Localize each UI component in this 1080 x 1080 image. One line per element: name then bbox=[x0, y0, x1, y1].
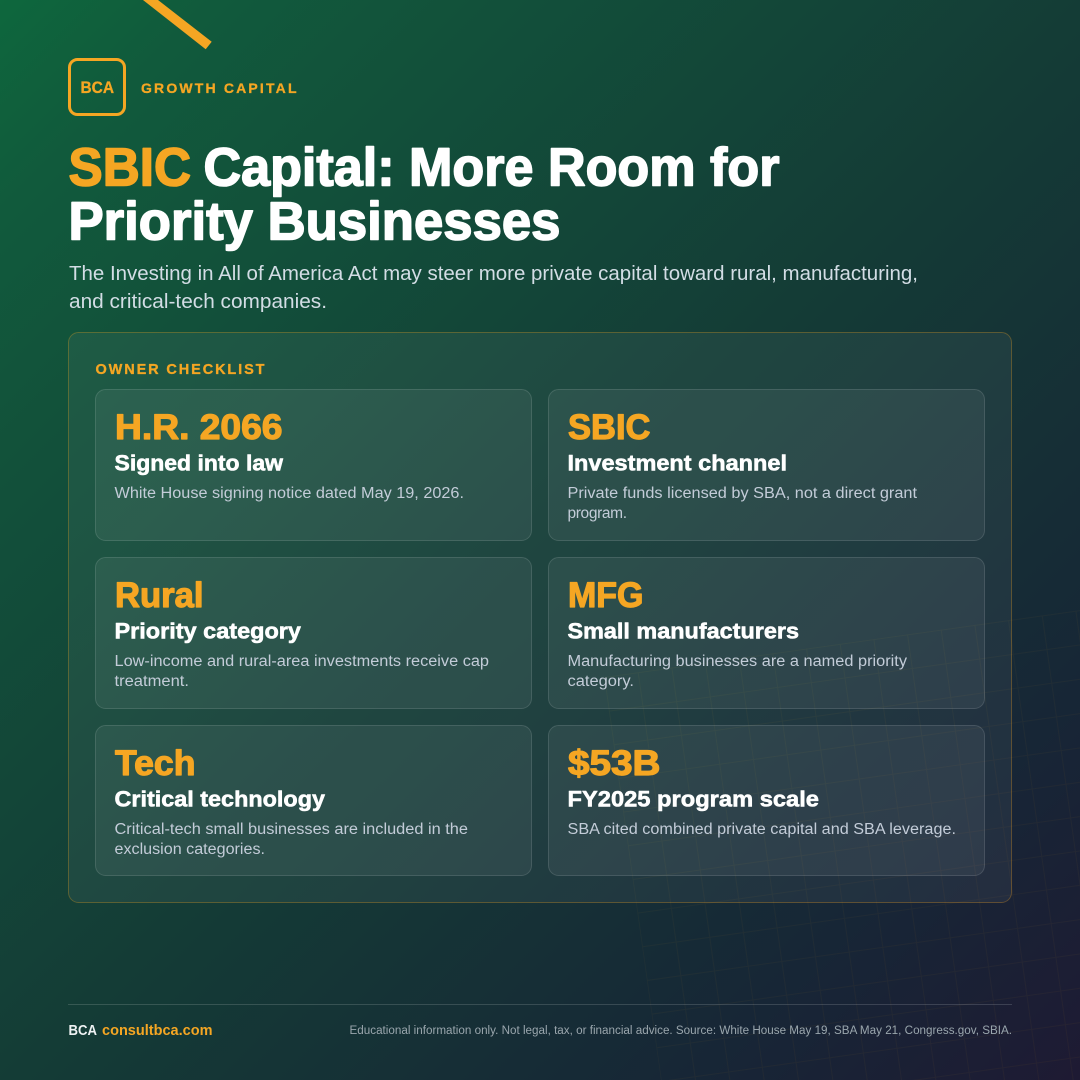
title: Priority Businesses bbox=[68, 192, 560, 252]
title: Capital: More Room for bbox=[204, 138, 780, 198]
panel heading: OWNER CHECKLIST bbox=[96, 362, 265, 378]
card: MFG bbox=[548, 558, 984, 708]
background grid pattern bbox=[604, 610, 1080, 1080]
card: Rural: Priority category bbox=[114, 618, 301, 644]
card: MFG: MFG bbox=[568, 576, 644, 615]
brand label: GROWTH CAPITAL bbox=[141, 80, 297, 96]
card: SBIC: Private funds licensed by SBA, not a direct grant bbox=[568, 485, 918, 502]
disclaimer: Educational information only. Not legal, tax, or financial advice. Source: White House May 19, SBA May 21, Congress.gov, SBIA. bbox=[350, 1025, 1012, 1037]
subtitle bbox=[69, 262, 918, 313]
panel: owner checklist bbox=[68, 332, 1012, 902]
logo badge bbox=[70, 60, 124, 114]
card: Tech: exclusion categories. bbox=[114, 841, 265, 858]
card: Tech: Critical technology bbox=[114, 786, 325, 812]
footer brand: BCA bbox=[68, 1023, 97, 1039]
card: H.R. 2066 bbox=[96, 390, 532, 540]
card: SBIC bbox=[548, 390, 984, 540]
title: SBIC bbox=[68, 138, 191, 198]
accent stripe bbox=[143, 0, 212, 49]
card: H.R. 2066: H.R. 2066 bbox=[115, 408, 282, 447]
card: H.R. 2066: Signed into law bbox=[114, 450, 283, 476]
brand header bbox=[70, 60, 297, 114]
card: $53B: SBA cited combined private capital and SBA leverage. bbox=[568, 821, 956, 838]
card: MFG: category. bbox=[568, 673, 634, 690]
card: Rural: Rural bbox=[115, 576, 204, 615]
card: H.R. 2066: White House signing notice dated May 19, 2026. bbox=[114, 485, 464, 502]
logo badge: BCA bbox=[80, 79, 114, 97]
card: SBIC: program. bbox=[568, 505, 627, 522]
subtitle: and critical-tech companies. bbox=[69, 290, 327, 313]
card: Rural: treatment. bbox=[114, 673, 189, 690]
card: MFG: Manufacturing businesses are a named priority bbox=[568, 653, 907, 670]
title bbox=[68, 138, 780, 252]
card: Tech bbox=[96, 726, 532, 876]
card: $53B: $53B bbox=[568, 744, 660, 783]
card: Rural: Low-income and rural-area investments receive cap bbox=[114, 653, 489, 670]
card: $53B bbox=[548, 726, 984, 876]
footer brand: consultbca.com bbox=[102, 1023, 212, 1039]
card: $53B: FY2025 program scale bbox=[568, 786, 819, 812]
card: SBIC: Investment channel bbox=[568, 450, 787, 476]
subtitle: The Investing in All of America Act may steer more private capital toward rural, manufacturing, bbox=[69, 262, 918, 285]
card: SBIC: SBIC bbox=[568, 408, 650, 447]
card: Tech: Tech bbox=[115, 744, 196, 783]
card: MFG: Small manufacturers bbox=[568, 618, 799, 644]
card: Tech: Critical-tech small businesses are included in the bbox=[114, 821, 468, 838]
footer bbox=[68, 1004, 1012, 1039]
card: Rural bbox=[96, 558, 532, 708]
